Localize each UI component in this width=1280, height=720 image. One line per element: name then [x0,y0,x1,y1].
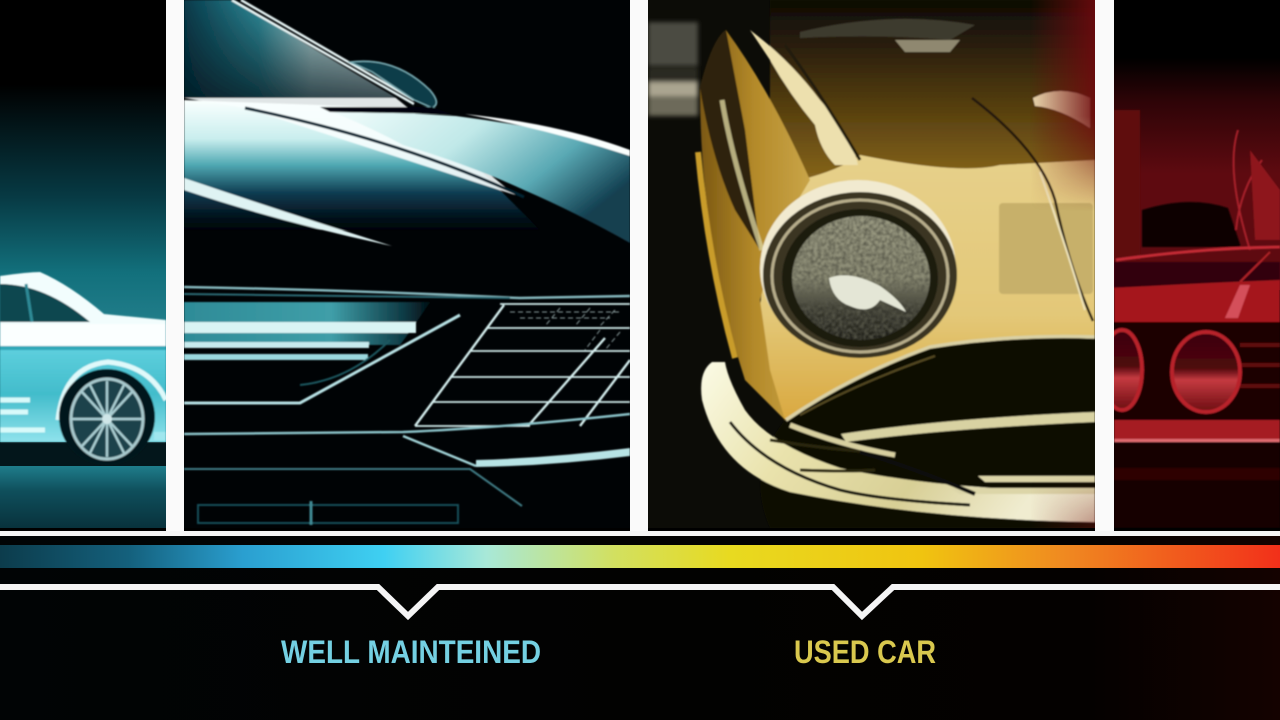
garage wall bands [648,22,698,116]
pointer line with notches [0,587,1280,616]
hood flat panel [999,203,1093,294]
grille mesh [415,304,630,426]
hood right sweep [322,108,630,243]
icon: side mirror [350,61,437,108]
hood top [770,0,1095,190]
red tinted right edge [1030,0,1095,528]
windshield pillar highlight [750,30,858,165]
panel: teal sedan side view [0,98,166,528]
windshield [184,0,396,98]
panel: teal car close-up [184,0,630,528]
divider lines [166,0,1114,532]
icon: sedan wheel [59,369,155,465]
body side stripe [184,178,392,246]
icon: red headlights [1102,330,1240,412]
panel: red car front [1114,66,1280,528]
icon: chrome bumper [701,362,1095,522]
hood crease line [972,98,1093,321]
cream hood [755,155,1095,420]
icon: white sedan [0,272,166,465]
top white rule [0,531,1280,536]
hood left block [184,100,540,230]
fender [700,30,810,420]
spectrum gradient bar [0,545,1280,568]
vent outline [198,501,458,525]
icon: headlight [760,180,957,358]
label: well maintained: WELL MAINTEINED [281,634,541,670]
bottom band background [0,535,1280,720]
lower black panel [760,337,1095,528]
lower bodywork [184,287,630,298]
panel: gold classic car close-up [648,0,1095,528]
label: used car: USED CAR [794,634,936,670]
hood highlight [1033,91,1090,128]
